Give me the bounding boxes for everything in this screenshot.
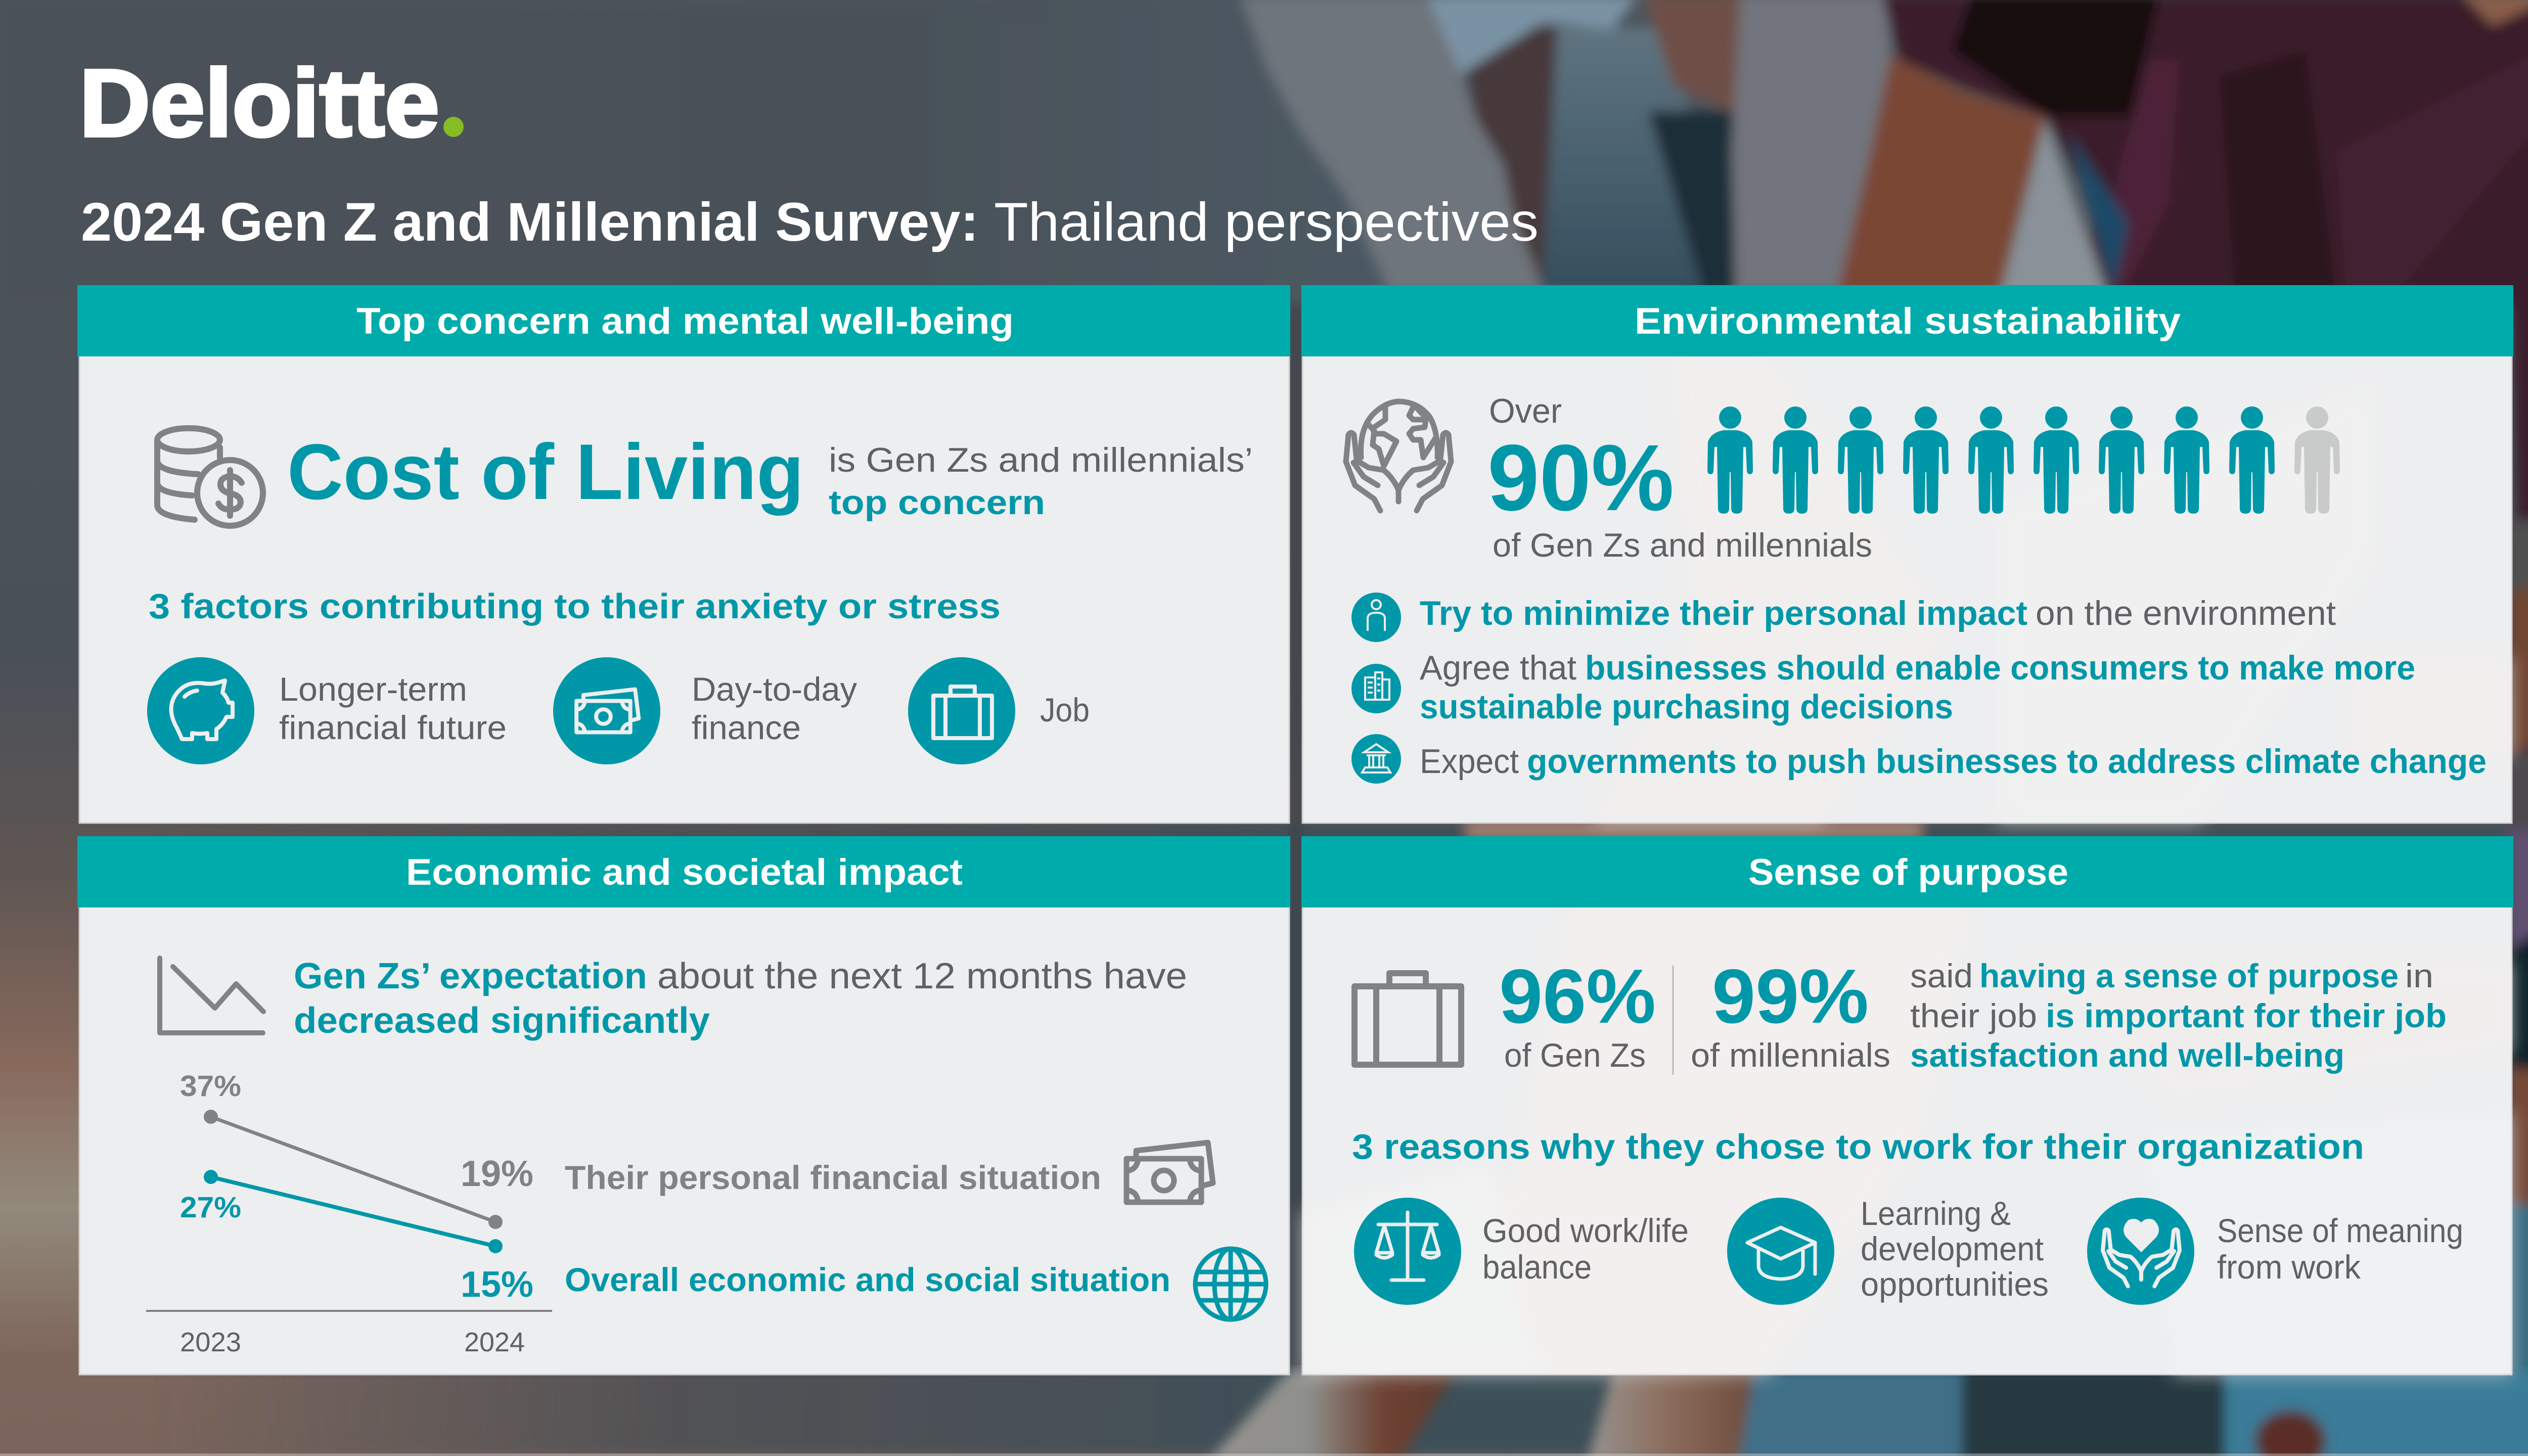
reason: learning and development opportunities: development <box>1861 1230 2044 1267</box>
icon: coins with dollar <box>157 428 263 526</box>
series label: overall economic and social situation: Overall economic and social situation <box>565 1261 1170 1298</box>
text: gen z expectation: about the next 12 months have <box>657 956 1187 996</box>
bullet: personal impact: Try to minimize their personal impact <box>1420 594 2027 632</box>
line chart: 2023 vs 2024: 15% <box>461 1264 533 1305</box>
text: sense of purpose statement: satisfaction and well-being <box>1910 1036 2344 1074</box>
bullet: personal impact <box>1351 593 2336 642</box>
heading: sense of purpose: Sense of purpose <box>1748 852 2068 893</box>
factor: day-to-day finance <box>553 657 857 764</box>
line chart: 2023 vs 2024: 27% <box>180 1191 241 1224</box>
panel: top concern and mental well-being <box>77 285 1290 823</box>
reason: sense of meaning from work: Sense of meaning <box>2217 1212 2463 1249</box>
reason: good work/life balance <box>1354 1198 1689 1305</box>
stat: 99 percent of millennials: 99% <box>1712 953 1869 1039</box>
bullet: businesses: businesses should enable consumers to make more <box>1585 649 2415 687</box>
heading: environmental sustainability: Environmental sustainability <box>1635 301 2181 342</box>
bullet: businesses: sustainable purchasing decisions <box>1420 688 1953 726</box>
stat: 96 percent of gen zs: 96% <box>1499 953 1656 1039</box>
bullet: governments: governments to push businesses to address climate change <box>1527 742 2487 781</box>
factor: day-to-day finance: Day-to-day <box>692 670 857 708</box>
panel: economic and societal impact <box>77 836 1290 1375</box>
subheading: 3 factors: 3 factors contributing to their anxiety or stress <box>149 586 1001 626</box>
icon: briefcase <box>1355 973 1461 1065</box>
reason: sense of meaning from work: from work <box>2217 1248 2361 1286</box>
heading: economic and societal impact: Economic and societal impact <box>406 852 963 893</box>
logo: Deloitte: Deloitte <box>79 50 439 157</box>
heading: top concern: Top concern and mental well-being <box>356 301 1014 342</box>
text: gen z expectation: Gen Zs’ expectation <box>294 956 647 996</box>
factor: day-to-day finance: finance <box>692 709 801 746</box>
text: top concern statement: is Gen Zs and millennials’ <box>829 441 1253 479</box>
stat: 99 percent of millennials: of millennials <box>1691 1036 1890 1074</box>
reason: learning and development opportunities <box>1727 1195 2049 1305</box>
title: 2024 Gen Z and Millennial Survey: <box>81 191 979 252</box>
series label: personal financial situation <box>565 1143 1213 1202</box>
title <box>81 191 1539 252</box>
factor: job: Job <box>1040 691 1090 729</box>
title: Thailand perspectives <box>994 191 1539 252</box>
text: gen z expectation <box>294 956 1187 1041</box>
bullet: businesses <box>1351 649 2415 726</box>
bullet: personal impact: on the environment <box>2036 594 2336 632</box>
panel: sense of purpose <box>1301 836 2513 1375</box>
line chart: 2023 vs 2024 <box>146 1070 552 1357</box>
factor: longer-term financial future: financial future <box>279 709 507 746</box>
icon: declining chart <box>160 958 263 1033</box>
bullet: governments <box>1351 734 2487 784</box>
bullet: governments: Expect <box>1420 742 1519 781</box>
stat: over 90 percent: of Gen Zs and millennials <box>1493 526 1872 564</box>
stat: over 90 percent: 90% <box>1487 426 1674 530</box>
text: sense of purpose statement: their job <box>1910 997 2037 1034</box>
reason: learning and development opportunities: Learning & <box>1861 1195 2011 1232</box>
reason: good work/life balance: balance <box>1482 1248 1592 1286</box>
text: sense of purpose statement: having a sense of purpose <box>1979 957 2399 994</box>
reason: learning and development opportunities: opportunities <box>1861 1265 2049 1303</box>
reason: good work/life balance: Good work/life <box>1482 1212 1689 1249</box>
text: top concern statement: top concern <box>829 483 1045 522</box>
icon: hands holding globe <box>1346 401 1451 511</box>
text: sense of purpose statement: in <box>2405 957 2433 994</box>
subheading: 3 reasons: 3 reasons why they chose to work for their organization <box>1352 1127 2364 1166</box>
panel: environmental sustainability <box>1301 285 2513 823</box>
factor: job <box>908 657 1090 764</box>
text: sense of purpose statement: is important for their job <box>2046 997 2447 1034</box>
line chart: 2023 vs 2024: 2023 <box>180 1327 241 1357</box>
line chart: 2023 vs 2024: 37% <box>180 1070 241 1103</box>
line chart: 2023 vs 2024: 19% <box>461 1154 533 1194</box>
series label: personal financial situation: Their personal financial situation <box>565 1159 1101 1196</box>
pictogram: 9 of 10 people <box>1707 406 2340 514</box>
bullet: businesses: Agree that <box>1420 649 1576 687</box>
stat: cost of living: Cost of Living <box>287 428 804 516</box>
text: sense of purpose statement: said <box>1910 957 1973 994</box>
text: top concern statement <box>829 441 1253 522</box>
text: sense of purpose statement <box>1910 957 2447 1074</box>
stat: over 90 percent: Over <box>1489 392 1562 430</box>
stat: over 90 percent <box>1487 392 1872 564</box>
factor: longer-term financial future: Longer-term <box>279 670 467 708</box>
reason: sense of meaning from work <box>2087 1198 2463 1305</box>
text: gen z expectation: decreased significantly <box>294 1000 710 1041</box>
stat: 99 percent of millennials <box>1691 953 1890 1074</box>
stat: 96 percent of gen zs: of Gen Zs <box>1504 1036 1646 1074</box>
factor: longer-term financial future <box>147 657 507 764</box>
line chart: 2023 vs 2024: 2024 <box>464 1327 525 1357</box>
series label: overall economic and social situation <box>565 1249 1266 1320</box>
